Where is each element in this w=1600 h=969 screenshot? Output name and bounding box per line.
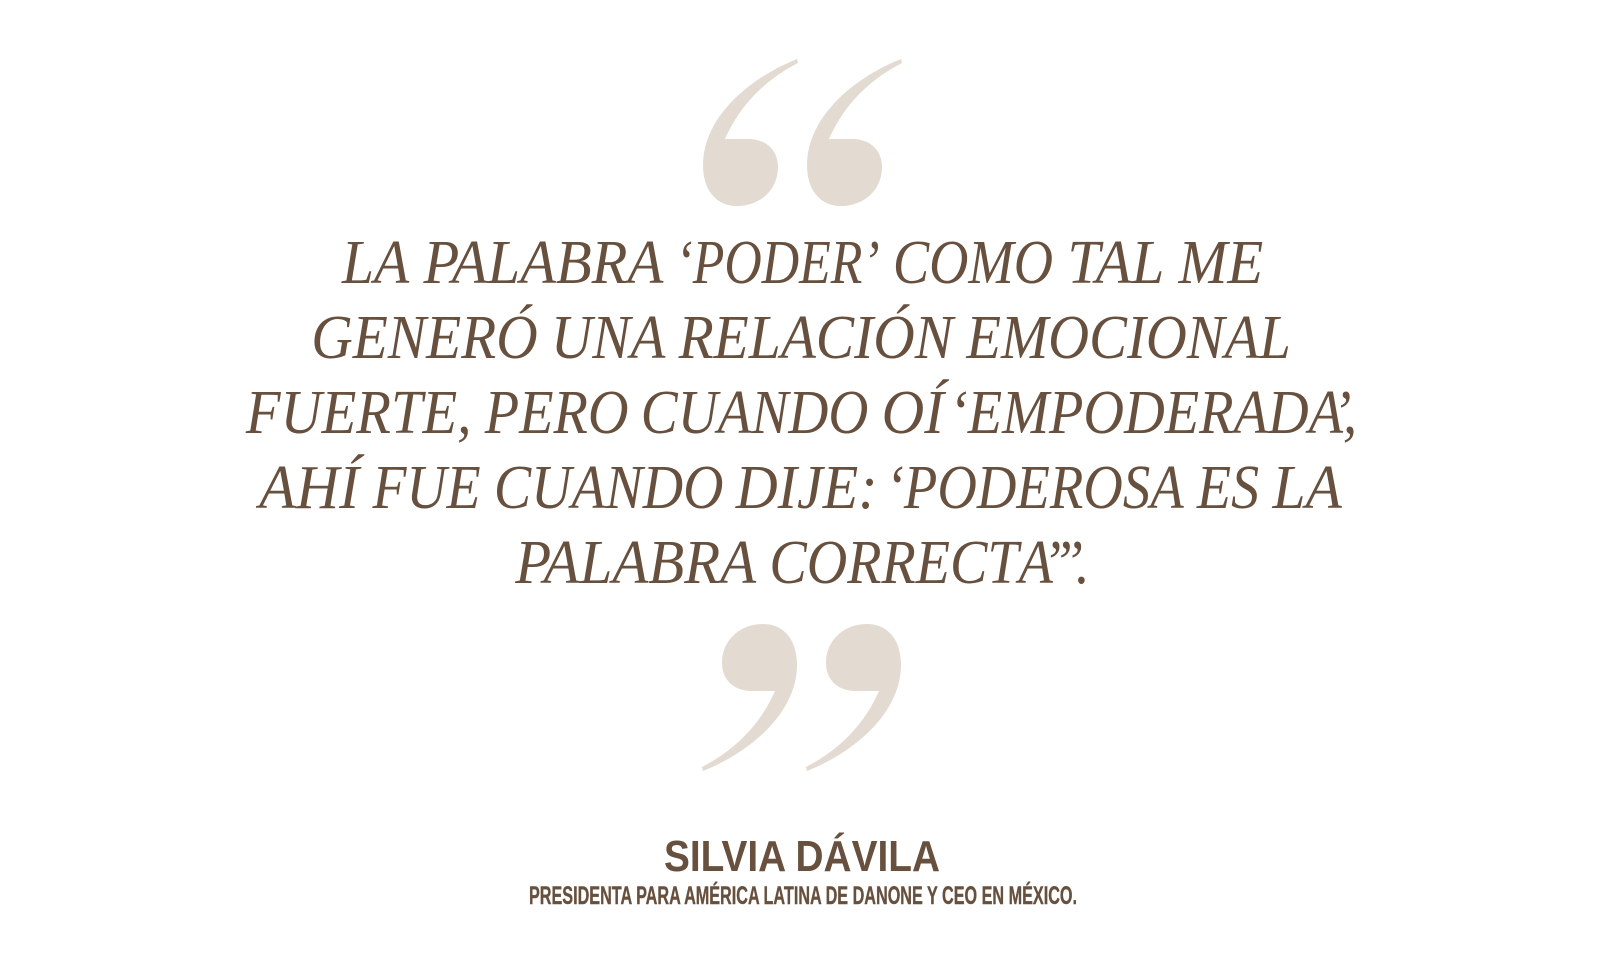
quote text: GENERÓ xyxy=(311,304,538,372)
quote text: CUANDO xyxy=(494,454,723,522)
quote text: LA xyxy=(1271,454,1343,522)
attribution name: SILVIA DÁVILA xyxy=(664,831,940,881)
quote text: PERO xyxy=(484,379,629,447)
quote text: OÍ xyxy=(882,379,950,447)
quote text: FUE xyxy=(372,454,481,522)
quote text: COMO xyxy=(893,229,1053,297)
quote text: FUERTE, xyxy=(245,379,471,447)
quote text: CUANDO xyxy=(641,379,868,447)
quote text: ‘PODER’ xyxy=(676,229,880,297)
quote text: TAL xyxy=(1067,229,1164,297)
quote text: ME xyxy=(1178,229,1263,297)
quote text: PALABRA xyxy=(514,529,757,597)
quote text xyxy=(245,229,1357,597)
quote text: DIJE: xyxy=(735,454,878,522)
icon: closing quotation marks xyxy=(702,624,901,771)
quote text: ‘PODEROSA xyxy=(886,454,1185,522)
quote text: CORRECTA’”. xyxy=(769,529,1090,597)
attribution role: PRESIDENTA PARA AMÉRICA LATINA DE DANONE Y CEO EN MÉXICO. xyxy=(529,881,1077,910)
quote text: LA xyxy=(341,229,410,297)
quote text: RELACIÓN xyxy=(678,304,956,372)
quote text: UNA xyxy=(551,304,666,372)
quote text: EMOCIONAL xyxy=(965,304,1291,372)
quote text: AHÍ xyxy=(255,454,365,522)
quote text: ES xyxy=(1196,454,1259,522)
quote text: PALABRA xyxy=(423,229,664,297)
icon: opening quotation marks xyxy=(703,59,902,206)
quote text: ‘EMPODERADA’, xyxy=(949,379,1357,447)
